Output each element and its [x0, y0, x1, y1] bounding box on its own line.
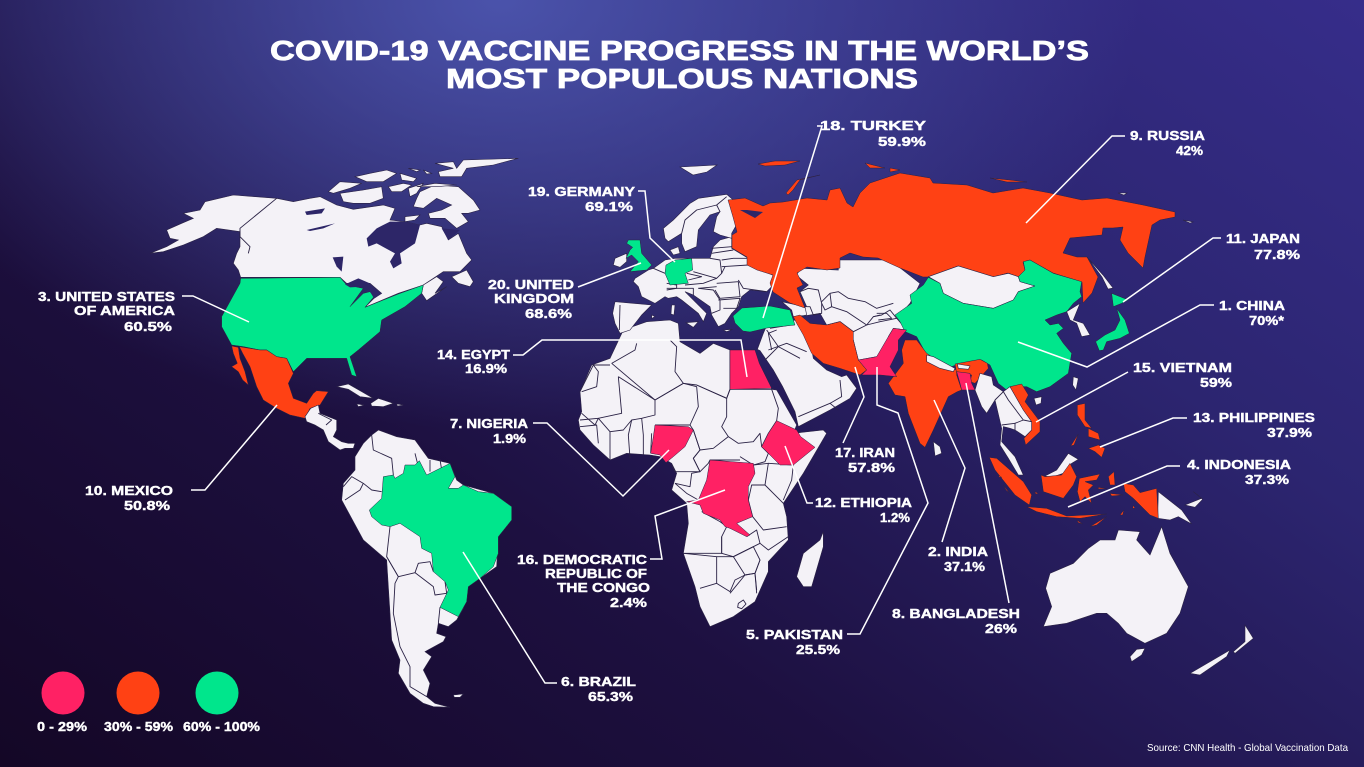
- callout: Germany: 19. GERMANY: [528, 184, 635, 199]
- callout: Democratic Republic of the Congo: THE CONGO: [557, 580, 650, 595]
- country: Egypt: [730, 350, 772, 389]
- callout: Philippines: 37.9%: [1267, 425, 1313, 440]
- callout: Nigeria: [450, 416, 669, 496]
- callout: United Kingdom: [488, 263, 641, 321]
- callout: United Kingdom: KINGDOM: [494, 291, 574, 306]
- callout: Russia: 9. RUSSIA: [1130, 128, 1206, 143]
- map region: South Asia and Oceania: [888, 340, 1253, 675]
- country: Turkey: [733, 306, 795, 332]
- callout: Iran: 17. IRAN: [835, 445, 895, 460]
- country: Vietnam: [1010, 384, 1040, 445]
- callout: Turkey: [763, 118, 927, 318]
- country: United Kingdom: [626, 240, 652, 272]
- callout: United Kingdom: 20. UNITED: [488, 277, 574, 292]
- callout: United States: [38, 289, 249, 334]
- callout: Mexico: 50.8%: [124, 498, 171, 513]
- callout: Indonesia: [1068, 457, 1292, 507]
- callout: Iran: [835, 367, 896, 475]
- callout: Pakistan: 5. PAKISTAN: [746, 627, 843, 642]
- callout: United States: 3. UNITED STATES: [38, 289, 175, 304]
- callout: Mexico: 10. MEXICO: [85, 483, 173, 498]
- legend item: 30% - 59%: 30% - 59%: [104, 719, 173, 734]
- callout: India: 37.1%: [944, 559, 985, 574]
- callout: Japan: 77.8%: [1254, 247, 1301, 262]
- country: Iran: [793, 315, 867, 375]
- callout: Germany: 69.1%: [585, 199, 634, 214]
- callout: Bangladesh: 8. BANGLADESH: [892, 606, 1020, 621]
- callout: Brazil: [463, 552, 636, 704]
- map region: Africa and Arabia: [578, 320, 857, 627]
- title: [270, 35, 1089, 94]
- country: Pakistan: [858, 328, 907, 377]
- callout: United States: OF AMERICA: [74, 303, 176, 318]
- country: Democratic Republic of the Congo: [687, 460, 755, 537]
- map region: Southeast Asia: [975, 373, 1158, 527]
- legend item: 60% - 100%: 60% - 100%: [183, 719, 260, 734]
- callout: Vietnam: 59%: [1200, 375, 1233, 390]
- callout: Vietnam: 15. VIETNAM: [1133, 360, 1232, 375]
- callout: United Kingdom: 68.6%: [525, 306, 573, 321]
- callout: India: [928, 400, 989, 574]
- callout: United States: 60.5%: [124, 319, 173, 334]
- map region: North America: [150, 195, 473, 418]
- callout: Democratic Republic of the Congo: 16. DEMOCRATIC: [517, 552, 648, 567]
- country: Germany: [665, 258, 693, 285]
- legend item: 0 - 29%: [37, 672, 87, 734]
- callout: Democratic Republic of the Congo: REPUBLIC OF: [545, 566, 647, 581]
- country: Indonesia: [989, 457, 1158, 527]
- callout: Ethiopia: 1.2%: [880, 510, 910, 525]
- world map: [150, 158, 1253, 707]
- title: COVID-19 VACCINE PROGRESS IN THE WORLD’S: [270, 35, 1089, 66]
- legend item: 60% - 100%: [183, 672, 260, 734]
- legend item: 30% - 59%: [104, 672, 173, 734]
- country: New Zealand: [1190, 625, 1253, 675]
- country: Japan: [1096, 293, 1129, 351]
- legend item: 0 - 29%: 0 - 29%: [37, 719, 87, 734]
- map region: Canadian Arctic islands: [328, 158, 518, 228]
- callout: Philippines: 13. PHILIPPINES: [1193, 410, 1315, 425]
- callout: Turkey: 18. TURKEY: [820, 118, 926, 133]
- callout: China: 70%*: [1249, 313, 1285, 328]
- country: India: [888, 340, 988, 447]
- callout: Bangladesh: 26%: [985, 621, 1018, 636]
- country: Russia: [728, 161, 1193, 308]
- source note: Source: CNN Health - Global Vaccination Data: [1147, 742, 1348, 754]
- callout: Pakistan: 25.5%: [796, 642, 841, 657]
- country: China: [895, 260, 1082, 392]
- callout: Nigeria: 7. NIGERIA: [450, 416, 529, 431]
- callout: Democratic Republic of the Congo: 2.4%: [610, 595, 648, 610]
- callout: Turkey: 59.9%: [878, 134, 927, 149]
- callout: Mexico: [85, 405, 277, 513]
- callout: Ethiopia: 12. ETHIOPIA: [815, 495, 913, 510]
- country: Nigeria: [651, 425, 693, 463]
- title: MOST POPULOUS NATIONS: [446, 63, 918, 94]
- callout: Brazil: 6. BRAZIL: [561, 674, 636, 689]
- callout: Indonesia: 37.3%: [1245, 472, 1290, 487]
- callout: Russia: 42%: [1176, 143, 1203, 158]
- callout: Bangladesh: [892, 383, 1020, 636]
- callout: Nigeria: 1.9%: [493, 431, 526, 446]
- country: United States: [222, 277, 423, 377]
- callout: Russia: [1026, 128, 1206, 223]
- callout: Japan: [1123, 231, 1301, 302]
- map region: Central Asia and Caucasus: [765, 260, 920, 360]
- callout: Pakistan: [746, 367, 928, 657]
- map region: Central America and Caribbean: [305, 384, 403, 450]
- callout: Egypt: 16.9%: [465, 361, 507, 376]
- map region: South America: [342, 430, 512, 707]
- country: Philippines: [1071, 403, 1105, 457]
- legend: [37, 672, 260, 734]
- country: Mexico: [232, 346, 328, 418]
- callout: Ethiopia: [785, 446, 913, 525]
- callout: Brazil: 65.3%: [588, 689, 634, 704]
- callout: Germany: [528, 184, 675, 262]
- callout: Egypt: 14. EGYPT: [437, 347, 510, 362]
- callout: Democratic Republic of the Congo: [517, 490, 725, 610]
- country: Ethiopia: [762, 421, 815, 465]
- callout: Egypt: [437, 340, 747, 377]
- map region: East Asia: [895, 260, 1129, 392]
- callout: China: [1018, 298, 1286, 367]
- callout: Indonesia: 4. INDONESIA: [1187, 457, 1292, 472]
- country: Mongolia: [928, 266, 1035, 308]
- callout: Iran: 57.8%: [848, 460, 896, 475]
- callout: China: 1. CHINA: [1219, 298, 1286, 313]
- callout: Japan: 11. JAPAN: [1226, 231, 1300, 246]
- country: Australia: [1043, 527, 1188, 643]
- country: Bangladesh: [957, 372, 975, 390]
- country: Brazil: [369, 461, 512, 617]
- map region: Europe: [613, 194, 777, 333]
- callout: Philippines: [1100, 410, 1315, 447]
- callout: India: 2. INDIA: [928, 544, 989, 559]
- callout: Vietnam: [1036, 360, 1233, 422]
